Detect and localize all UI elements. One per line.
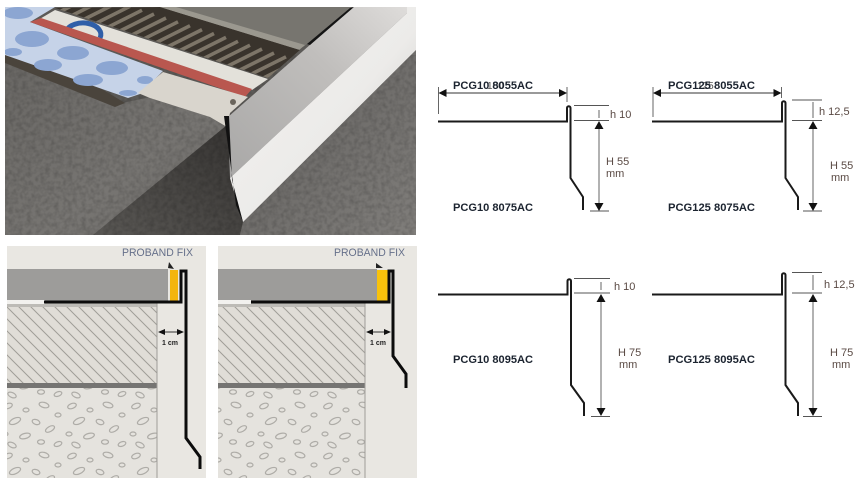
yellow PROBAND FIX band [170, 270, 178, 301]
pale screed edge [160, 7, 305, 51]
concrete texture [5, 55, 416, 235]
profile diagram: PCG10 55 mm [438, 80, 631, 214]
screw hole [230, 99, 236, 105]
width value: 100 [487, 81, 504, 92]
tile layer [218, 269, 377, 301]
H dimension [590, 121, 629, 211]
metal flange [138, 72, 248, 127]
concrete right side [240, 50, 416, 235]
h dimension [792, 272, 855, 293]
H dimension: H 75 [830, 347, 853, 359]
profile upper face [228, 7, 407, 178]
label PROBAND FIX: PROBAND FIX [122, 247, 193, 259]
width value: 125 [697, 81, 714, 92]
pointer arrow [376, 263, 383, 268]
adhesive mortar ridges [55, 0, 300, 78]
model name bottom: PCG125 8075AC [668, 202, 755, 214]
profile outline [652, 273, 798, 416]
white adhesive layer [7, 300, 45, 304]
profile outline [438, 106, 583, 210]
model name top: PCG125 8055AC [668, 80, 755, 92]
H dimension: mm [832, 359, 850, 371]
section drawing: right detail [218, 246, 417, 478]
model name: PCG10 8095AC [453, 354, 533, 366]
dark membrane band [218, 383, 365, 388]
tile layer [7, 269, 168, 301]
H dimension: mm [606, 168, 624, 180]
shadow edge [224, 116, 243, 222]
h dimension: h 10 [610, 109, 631, 121]
h dimension: h 12,5 [819, 106, 850, 118]
hatched screed [7, 307, 157, 384]
concrete top surface [5, 55, 228, 235]
H dimension: mm [619, 359, 637, 371]
red stripe [30, 18, 252, 97]
width dimension [653, 87, 782, 117]
pebble concrete [218, 388, 365, 478]
1 cm dimension [158, 329, 184, 347]
H dimension: H 55 [606, 156, 629, 168]
profile lower drip band [230, 7, 416, 222]
section drawing: left detail [7, 246, 206, 478]
label PROBAND FIX: PROBAND FIX [334, 247, 405, 259]
1 cm dimension [366, 329, 391, 347]
model name bottom: PCG10 8075AC [453, 202, 533, 214]
upper screed background [150, 7, 356, 47]
1 cm dimension: 1 cm [162, 340, 178, 347]
blue dimpled membrane [3, 7, 163, 98]
profile diagram: PCG10 75 mm [438, 278, 641, 416]
white sealing strip [38, 10, 268, 90]
width dimension [438, 87, 567, 114]
h dimension: h 10 [614, 281, 635, 293]
profile outline [438, 279, 584, 416]
h dimension [792, 100, 850, 120]
pointer arrow [168, 262, 174, 269]
dark membrane band [7, 383, 157, 388]
h dimension [574, 106, 631, 121]
concrete front side [93, 125, 243, 235]
H dimension [591, 294, 641, 416]
H dimension [803, 121, 853, 211]
profile outline [652, 101, 798, 210]
model name top: PCG10 8055AC [453, 80, 533, 92]
hatched screed [218, 307, 365, 384]
yellow PROBAND FIX band [377, 270, 388, 301]
H dimension [803, 294, 853, 416]
pebble concrete [7, 388, 157, 478]
1 cm dimension: 1 cm [370, 340, 386, 347]
H dimension: H 55 [830, 160, 853, 172]
white adhesive layer [218, 300, 251, 304]
photo: stainless steel step profile [3, 0, 416, 235]
H dimension: H 75 [618, 347, 641, 359]
blue logo on strip [66, 23, 101, 38]
black profile [251, 271, 406, 388]
model name: PCG125 8095AC [668, 354, 755, 366]
h dimension: h 12,5 [824, 279, 855, 291]
h dimension [574, 278, 635, 293]
mortar under membrane [5, 55, 125, 107]
H dimension: mm [831, 172, 849, 184]
profile diagram: PCG125 75 mm [652, 272, 855, 416]
profile diagram: PCG125 55 mm [652, 80, 853, 214]
black profile [44, 271, 200, 469]
